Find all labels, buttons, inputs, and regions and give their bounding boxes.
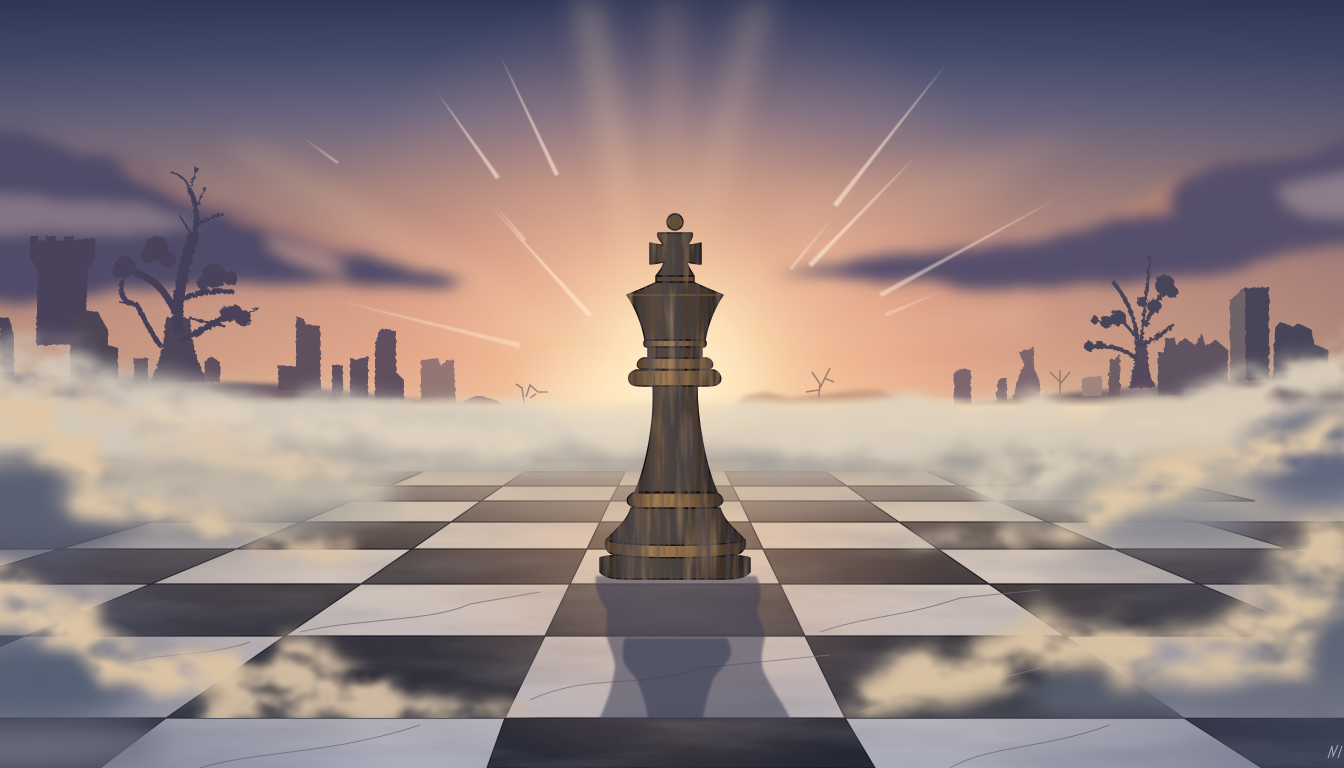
foreground cloud: bottom right [835,507,1344,730]
dark cloud: left [0,125,470,304]
right foreground crests [835,507,1344,722]
light tiles base [0,472,1344,768]
tile floor haze [0,462,1344,532]
gnarled tree [1084,257,1178,396]
ball finial [667,214,683,230]
chessboard floor [0,462,1344,768]
right bank crests [840,352,1344,537]
horizon fog band [0,396,1344,486]
small bare trees [1050,370,1070,398]
left ruins and tree silhouette [0,168,548,410]
faded ruins [954,347,1102,405]
dark cloud: right [775,132,1344,285]
lower-left haze below fog line [0,722,165,768]
outer shadow [596,576,792,722]
cross finial [650,233,701,276]
neck [648,347,702,358]
right cloud bank [840,352,1344,543]
chess king piece [600,214,750,579]
left bank crests [0,395,570,552]
distant fog drifts [270,406,1060,474]
far ruins [735,390,908,412]
sunlight glow over horizon [520,370,760,414]
mid-distance ruins [134,316,404,400]
crown cap [656,276,694,282]
far ruins [421,358,510,410]
dark tiles [0,472,1344,768]
marble veins [130,590,1110,768]
light streaks [302,55,1060,348]
small bare tree [516,384,548,408]
inner shadow [623,638,731,718]
sky background [0,0,1344,430]
crown [627,282,723,340]
castle tower [0,236,118,385]
sun rays [225,0,1090,370]
broken tower [1158,287,1330,395]
king's shadow on the floor [596,576,792,722]
upper ring [644,340,706,347]
foreground cloud: bottom left [0,576,530,768]
base [600,554,750,579]
rolling ground under left ruins [0,372,520,410]
rolling ground under right ruins [940,368,1344,420]
marble mottling [0,472,1344,768]
cold edges of floor [0,472,1344,768]
skirt [605,508,745,551]
left bank mass [0,341,570,514]
right bank shadows [900,403,1344,543]
left cloud bank [0,341,570,553]
clipped fog mass [0,576,530,722]
left bank shadows [0,374,400,553]
middle ring [637,358,713,370]
right ruins and tree silhouette [735,257,1344,420]
tapered body [635,386,717,492]
wide collar [629,370,721,386]
lip ring [606,540,745,558]
lower collar [627,493,723,508]
right foreground shadows [882,564,1344,718]
signature [1328,745,1342,758]
gnarled tree [112,168,258,382]
sunlit warmth on floor [0,472,1344,768]
